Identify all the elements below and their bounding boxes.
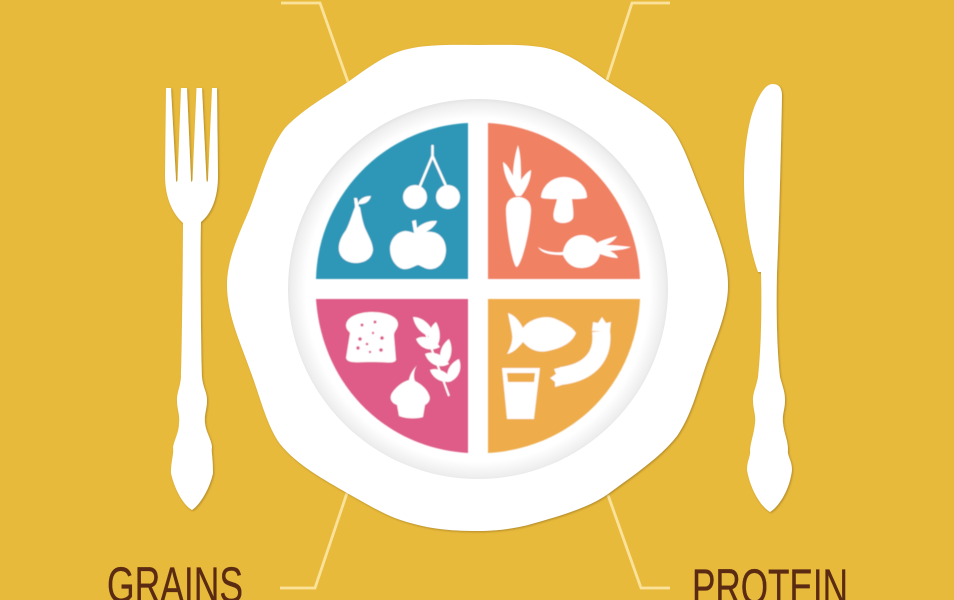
icon: wheat	[413, 317, 460, 396]
icon: knife	[744, 84, 792, 512]
icon: cherries	[403, 146, 460, 209]
icon: bread	[346, 312, 398, 362]
connector line: bottom left	[280, 493, 347, 588]
orange segment	[488, 123, 640, 279]
quadrant: grains	[316, 299, 468, 453]
icon: glass of milk	[502, 368, 540, 419]
icon: mushroom	[541, 177, 587, 223]
icon: apple	[390, 220, 446, 269]
plate: scalloped rim	[227, 45, 728, 531]
icon: pear	[339, 196, 373, 263]
amber segment	[488, 299, 640, 453]
blue segment	[316, 123, 468, 279]
icon: fork	[165, 88, 218, 510]
icon: fish	[507, 313, 576, 354]
connector line: top left	[281, 3, 348, 82]
pink segment	[316, 299, 468, 453]
connector line: top right	[607, 3, 670, 80]
plate: inner well	[288, 99, 668, 479]
bread seeds	[356, 320, 384, 353]
icon: cupcake	[391, 365, 430, 418]
icon: beet	[538, 235, 631, 268]
quadrant: vegetables	[488, 123, 640, 279]
quadrant: fruits	[316, 123, 468, 279]
connector line: bottom right	[608, 495, 670, 588]
quadrant: protein	[488, 299, 640, 453]
icon: carrot	[503, 145, 531, 267]
icon: sausage	[550, 317, 611, 387]
